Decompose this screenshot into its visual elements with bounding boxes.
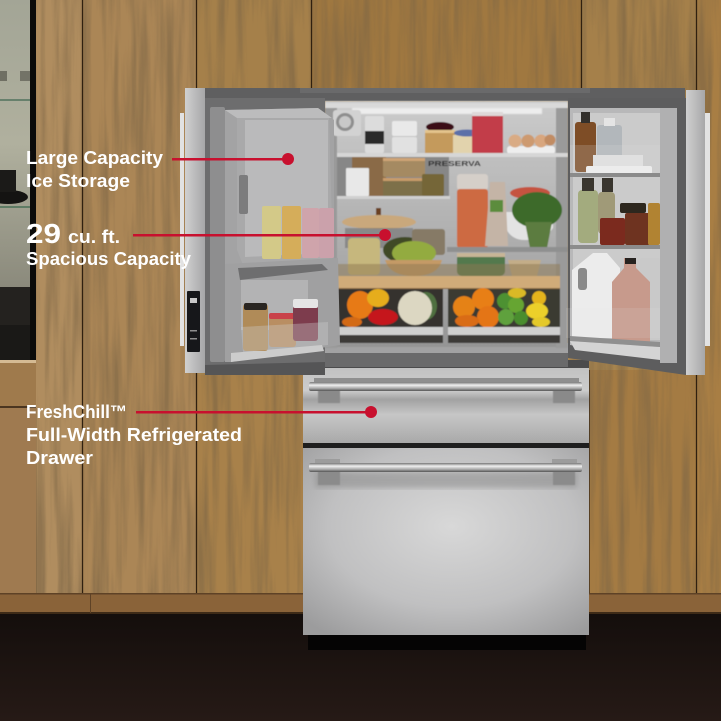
drawer description line 1: Full-Width Refrigerated bbox=[26, 425, 242, 445]
interior compartment bbox=[325, 101, 568, 348]
left crisper drawer bbox=[335, 289, 443, 343]
callout: drawer bbox=[26, 402, 377, 468]
capacity unit: cu. ft. bbox=[68, 227, 120, 247]
left door bbox=[185, 88, 340, 375]
drawer title: FreshChill™ bbox=[26, 402, 127, 422]
capacity number: 29 bbox=[26, 218, 61, 249]
callout: capacity bbox=[26, 218, 391, 269]
upper drawer bbox=[303, 368, 589, 443]
leader line bbox=[172, 153, 294, 165]
lidded jar and salad bbox=[342, 208, 445, 276]
middle shelf items bbox=[346, 158, 444, 197]
upper compartment frame bbox=[180, 88, 710, 367]
icemaker fan unit bbox=[333, 110, 361, 136]
middle shelf bbox=[337, 196, 450, 199]
refrigerator bbox=[180, 88, 710, 650]
callout: ice storage bbox=[26, 148, 294, 191]
tall shelf items bbox=[457, 174, 562, 248]
leader line bbox=[133, 229, 391, 241]
right glass shelf bbox=[447, 247, 568, 252]
leader line bbox=[136, 406, 377, 418]
upper door shelf items bbox=[570, 112, 660, 177]
label second line: Ice Storage bbox=[26, 171, 130, 191]
middle door shelf items bbox=[570, 178, 660, 249]
PRESERVA label: PRESERVA bbox=[428, 161, 481, 168]
top shelf items bbox=[365, 112, 556, 154]
cans in bin bbox=[262, 206, 334, 259]
drawer description line 2: Drawer bbox=[26, 448, 93, 468]
capacity description: Spacious Capacity bbox=[26, 249, 191, 269]
lower freezer drawers bbox=[303, 360, 589, 650]
floor and plinth bbox=[0, 593, 721, 721]
cucumber bowl and container bbox=[457, 253, 541, 276]
ice storage bin bbox=[237, 118, 334, 265]
lower door shelf items bbox=[566, 253, 660, 347]
lower door bin bbox=[225, 258, 340, 362]
wood shelf bbox=[334, 264, 560, 289]
right crisper drawer bbox=[448, 288, 560, 343]
top glass shelf bbox=[337, 153, 568, 157]
control panel display bbox=[187, 291, 200, 352]
label: Large Capacity bbox=[26, 148, 163, 168]
right door bbox=[566, 90, 705, 375]
lower drawer bbox=[303, 448, 589, 635]
left alcove with shelves bbox=[0, 0, 36, 594]
